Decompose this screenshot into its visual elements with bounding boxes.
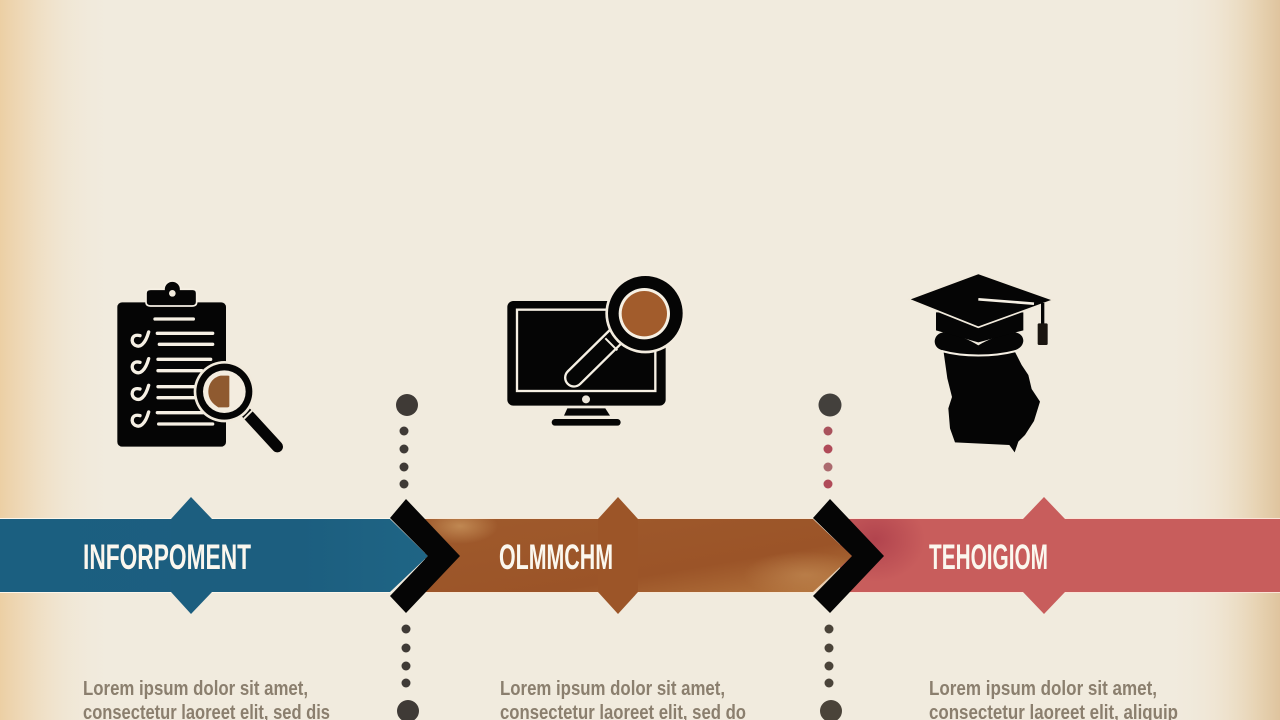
icon part: state silhouette (943, 350, 1040, 452)
chevron arrow 1 (390, 499, 460, 613)
text block: step 2: Lorem ipsum dolor sit amet, (500, 678, 725, 700)
icon: graduation cap on Georgia state silhouette (908, 273, 1053, 452)
timeline band: red segment (825, 497, 1280, 614)
cream line under band (942, 351, 1016, 355)
icon part: cap crown (936, 312, 1023, 342)
icon: computer monitor with magnifier (507, 273, 685, 426)
icon part: magnifier (194, 361, 277, 447)
icon: clipboard with magnifier (117, 281, 277, 447)
icon part: tassel cord (978, 299, 1034, 304)
dotted connector: lower left (397, 624, 419, 720)
icon part: tassel (1038, 303, 1048, 345)
icon part: monitor stand (564, 408, 610, 416)
dotted connector: upper left (396, 394, 418, 488)
icon part: magnifier handle (574, 336, 617, 378)
icon part: magnifier lens (605, 273, 685, 353)
text block: step 1: Lorem ipsum dolor sit amet, (83, 678, 308, 700)
blue diamond marker (171, 497, 212, 614)
icon part: checklist lines (155, 319, 213, 424)
icon part: clipboard clip (146, 281, 197, 306)
timeline band: brown segment (422, 497, 867, 614)
text block: step 3: Lorem ipsum dolor sit amet, (929, 678, 1157, 700)
text block: step 1 (83, 678, 330, 720)
icon part: cap band (935, 332, 1023, 354)
red diamond marker (1023, 497, 1065, 614)
text block: step 2 (500, 678, 746, 720)
brown diamond marker (598, 497, 638, 614)
heading: step 1: INFORPOMENT (83, 538, 251, 577)
timeline band: blue segment (0, 497, 428, 614)
icon part: mortarboard (908, 273, 1053, 327)
text block: step 3 (929, 678, 1178, 720)
chevron arrow 2 (813, 499, 884, 613)
heading: step 2: OLMMCHM (499, 538, 613, 577)
heading: step 3: TEHOIGIOM (929, 538, 1048, 577)
icon part: check marks (132, 332, 149, 426)
dotted connector: lower right (820, 624, 842, 720)
dotted connector: upper right (818, 394, 842, 488)
icon part: monitor base (552, 419, 621, 426)
